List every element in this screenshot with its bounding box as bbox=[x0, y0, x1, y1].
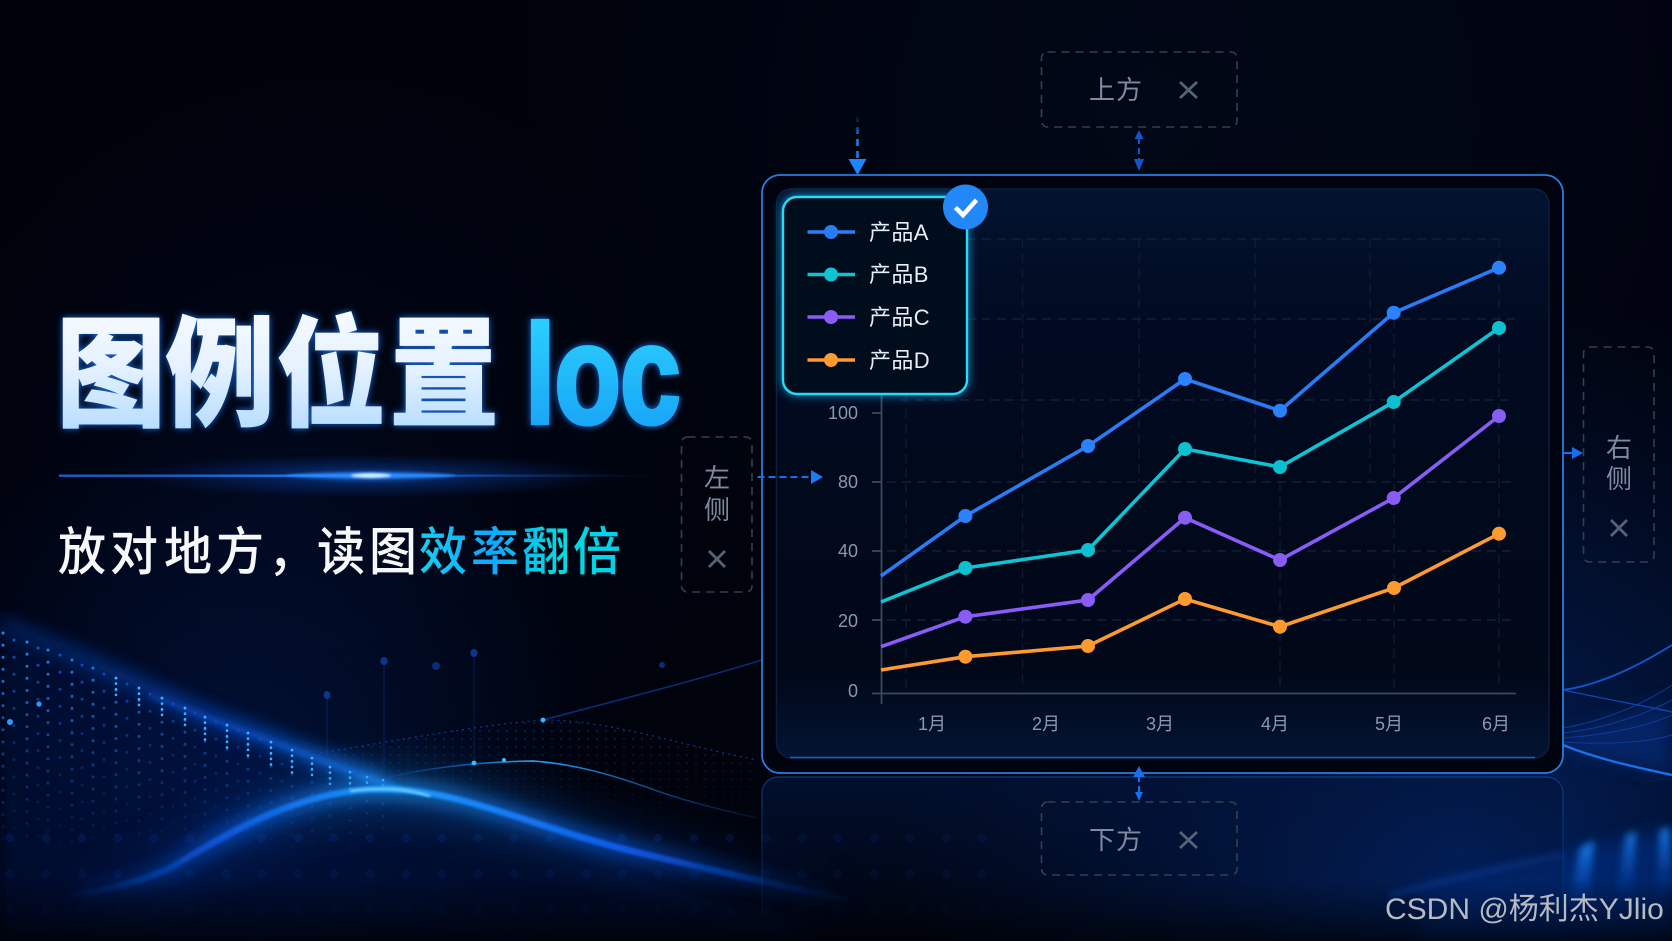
callout: bottom option: 下方 bbox=[1089, 820, 1143, 857]
decorative wave: thin dotted ridges bbox=[320, 660, 762, 820]
chart bbox=[828, 239, 1516, 734]
x axis labels: 3月 bbox=[1146, 714, 1174, 734]
legend item: 产品A bbox=[808, 220, 929, 245]
callout: bottom option bbox=[1042, 802, 1237, 875]
title: loc: loc bbox=[525, 295, 680, 453]
decorative waves at right of panel bbox=[1563, 645, 1672, 775]
panel: chart outer frame bbox=[762, 175, 1563, 773]
arrow: bottom option to panel bbox=[1133, 766, 1145, 801]
legend item: 产品D bbox=[808, 348, 930, 373]
series: 产品D bbox=[881, 527, 1506, 670]
legend item: 产品C bbox=[808, 305, 930, 330]
subtitle: highlighted part: 效率翻倍 bbox=[419, 511, 621, 586]
x axis labels bbox=[918, 714, 1510, 734]
arrow: panel to right option bbox=[1563, 447, 1583, 459]
callout: left option: 侧 bbox=[704, 490, 730, 527]
subtitle: white part: 放对地方，读图 bbox=[58, 511, 417, 586]
y axis labels: 100 bbox=[828, 403, 858, 423]
decorative wave: main glowing curve bbox=[0, 789, 1000, 925]
axes bbox=[872, 394, 1516, 704]
series: 产品C bbox=[881, 409, 1506, 647]
arrow: into panel corner bbox=[848, 115, 866, 175]
legend item: 产品A: 产品A bbox=[869, 220, 929, 245]
x axis labels: 6月 bbox=[1482, 714, 1510, 734]
legend item: 产品C: 产品C bbox=[869, 305, 930, 330]
legend item: 产品B bbox=[808, 262, 929, 287]
legend item: 产品B: 产品B bbox=[869, 262, 929, 287]
callout: right option: 右 bbox=[1606, 428, 1632, 465]
series: 产品A bbox=[881, 261, 1506, 576]
y axis labels: 80 bbox=[838, 472, 858, 492]
arrow: top option to panel bbox=[1134, 130, 1144, 171]
callout: right option: 侧 bbox=[1606, 459, 1632, 496]
callout: right option bbox=[1584, 347, 1654, 562]
title bbox=[56, 279, 680, 453]
y axis labels: 40 bbox=[838, 541, 858, 561]
panel reflection bbox=[762, 777, 1563, 941]
grid lines bbox=[872, 239, 1515, 690]
title: 图例位置: 图例位置 bbox=[56, 279, 499, 452]
decorative wave: dot field at lower left bbox=[0, 623, 1000, 941]
x axis labels: 4月 bbox=[1261, 714, 1289, 734]
x axis labels: 2月 bbox=[1032, 714, 1060, 734]
y axis labels bbox=[828, 403, 858, 701]
subtitle bbox=[58, 511, 621, 586]
watermark: CSDN @杨利杰YJlio bbox=[1385, 893, 1664, 926]
arrow: left option to chart bbox=[758, 470, 823, 484]
x axis labels: 5月 bbox=[1375, 714, 1403, 734]
series: 产品B bbox=[881, 321, 1506, 602]
panel: chart inner bbox=[776, 189, 1549, 758]
decorative light beams at bottom right bbox=[1390, 827, 1672, 941]
x axis labels: 1月 bbox=[918, 714, 946, 734]
y axis labels: 0 bbox=[848, 681, 858, 701]
icon: check badge bbox=[943, 184, 988, 230]
bottom fade bbox=[0, 880, 1672, 941]
callout: left option: 左 bbox=[704, 458, 730, 495]
y axis labels: 20 bbox=[838, 611, 858, 631]
callout: top option bbox=[1042, 52, 1237, 127]
legend bbox=[783, 184, 988, 394]
title divider with flare bbox=[59, 454, 659, 498]
callout: left option bbox=[682, 437, 752, 592]
callout: top option: 上方 bbox=[1089, 70, 1143, 107]
legend frame bbox=[783, 197, 967, 394]
legend item: 产品D: 产品D bbox=[869, 348, 930, 373]
